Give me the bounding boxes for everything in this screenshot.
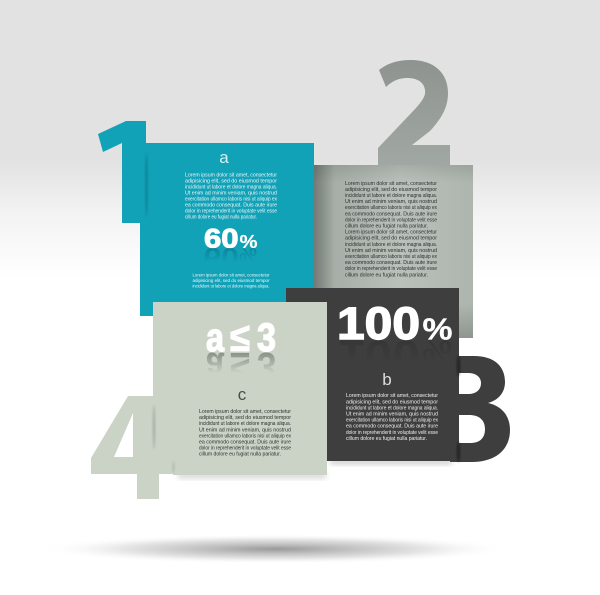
grey card text: cillum dolore eu fugiat nulla pariatur. [345,224,428,230]
stat 60% reflection: % [239,244,257,264]
floor shadow [40,534,510,564]
stat a ≤ 3: 3 [257,316,276,360]
stat 100%: % [422,312,452,346]
teal card text: adipisicing elit, sed do eiusmod tempor [185,178,277,184]
teal card text: cillum dolore eu fugiat nulla pariatur. [185,214,257,220]
panel: step 4 [91,302,327,499]
fold shadows [153,405,174,473]
stat 60% reflection: 60 [204,242,239,273]
stat a ≤ 3 reflection: ≤ [230,344,250,388]
green card text: Ut enim ad minim veniam, quis nostrud [199,427,291,433]
grey card text: ea commodo consequat. Duis aute irure [345,211,437,217]
green card text [199,409,291,458]
grey card text: cillum dolore eu fugiat nulla pariatur. [345,272,428,278]
grey card [312,165,473,338]
grey card text: ea commodo consequat. Duis aute irure [345,260,437,266]
teal card small text [192,272,270,288]
stat 60% [204,224,258,254]
teal card text: dolor in reprehenderit in voluptate velit esse [185,208,277,214]
grey card text [345,181,437,278]
stat 100% [337,298,452,349]
teal card small text: incididunt ut labore et dolore magna aliqua. [192,284,270,288]
dark card text: ea commodo consequat. Duis aute irure [346,424,438,430]
dark card text: dolor in reprehenderit in voluptate velit esse [346,430,438,436]
stat a ≤ 3: a [206,316,225,360]
card shadow [178,473,326,478]
dark card text: cillum dolore eu fugiat nulla pariatur. [346,436,427,442]
grey card text: incididunt ut labore et dolore magna aliqua. [345,242,437,248]
stat 60%: 60 [204,224,238,254]
letter a: a [219,148,229,167]
grey card text: Ut enim ad minim veniam, quis nostrud [345,248,437,254]
numeral 4 and green card [91,302,327,499]
numeral 3 [450,356,510,462]
green card text: Lorem ipsum dolor sit amet, consectetur [199,409,291,415]
teal card small text: Lorem ipsum dolor sit amet, consectetur [192,272,270,278]
stat 100% reflection: 100 [337,330,420,382]
panel: step 3 [286,288,510,464]
green card text: incididunt ut labore et dolore magna aliqua. [199,421,291,427]
dark card text [346,393,438,442]
grey card text: Ut enim ad minim veniam, quis nostrud [345,199,437,205]
grey card text: adipisicing elit, sed do eiusmod tempor [345,236,437,242]
teal card text: Lorem ipsum dolor sit amet, consectetur [185,172,277,178]
letter c: c [238,385,247,404]
green card text: cillum dolore eu fugiat nulla pariatur. [199,452,281,458]
stat a ≤ 3 reflection [207,352,275,370]
stat a ≤ 3 reflection: 3 [257,344,276,388]
panel: step 1 [98,121,314,316]
grey card text: Lorem ipsum dolor sit amet, consectetur [345,230,437,236]
grey card text: exercitation ullamco laboris nisi ut aliquip ex [345,205,437,211]
grey card text: Lorem ipsum dolor sit amet, consectetur [345,181,437,187]
green card text: adipisicing elit, sed do eiusmod tempor [199,415,291,421]
teal card small text: adipisicing elit, sed do eiusmod tempor [192,278,270,283]
letter b: b [382,370,392,389]
grey card text: adipisicing elit, sed do eiusmod tempor [345,187,437,193]
grey card text: dolor in reprehenderit in voluptate velit esse [345,266,437,272]
stat a ≤ 3: ≤ [230,316,250,360]
stat 60% reflection [205,248,256,258]
dark card text: Lorem ipsum dolor sit amet, consectetur [346,393,438,399]
fold shadows [457,356,460,462]
teal card text: incididunt ut labore et dolore magna aliqua. [185,184,277,190]
fold shadow [146,153,148,217]
stat 60%: % [240,232,258,252]
dark card [286,288,459,461]
stat a ≤ 3 [206,316,276,360]
green card text: ea commodo consequat. Duis aute irure [199,440,291,446]
dark card text: adipisicing elit, sed do eiusmod tempor [346,399,438,405]
stat a ≤ 3 reflection: a [206,344,225,388]
stat 100% reflection: % [422,334,452,368]
grey card text: dolor in reprehenderit in voluptate velit esse [345,217,437,223]
stat 100% reflection [376,340,408,341]
green card text: dolor in reprehenderit in voluptate velit esse [199,446,291,452]
panel: step 2 [312,60,473,338]
green card text: exercitation ullamco laboris nisi ut aliquip ex [199,433,291,439]
grey card text: incididunt ut labore et dolore magna aliqua. [345,193,437,199]
dark card text: Ut enim ad minim veniam, quis nostrud [346,412,438,418]
stat 100%: 100 [337,298,420,349]
card shadow [330,459,452,464]
numeral 1 and teal card [98,121,314,316]
teal card text: ea commodo consequat. Duis aute irure [185,202,277,208]
teal card text: Ut enim ad minim veniam, quis nostrud [185,190,277,196]
dark card text: exercitation ullamco laboris nisi ut aliquip ex [346,418,438,424]
teal card text [185,172,277,220]
grey card text: exercitation ullamco laboris nisi ut aliquip ex [345,254,437,260]
teal card text: exercitation ullamco laboris nisi ut aliquip ex [185,196,277,202]
dark card text: incididunt ut labore et dolore magna aliqua. [346,405,438,411]
numeral 2 [378,60,450,166]
